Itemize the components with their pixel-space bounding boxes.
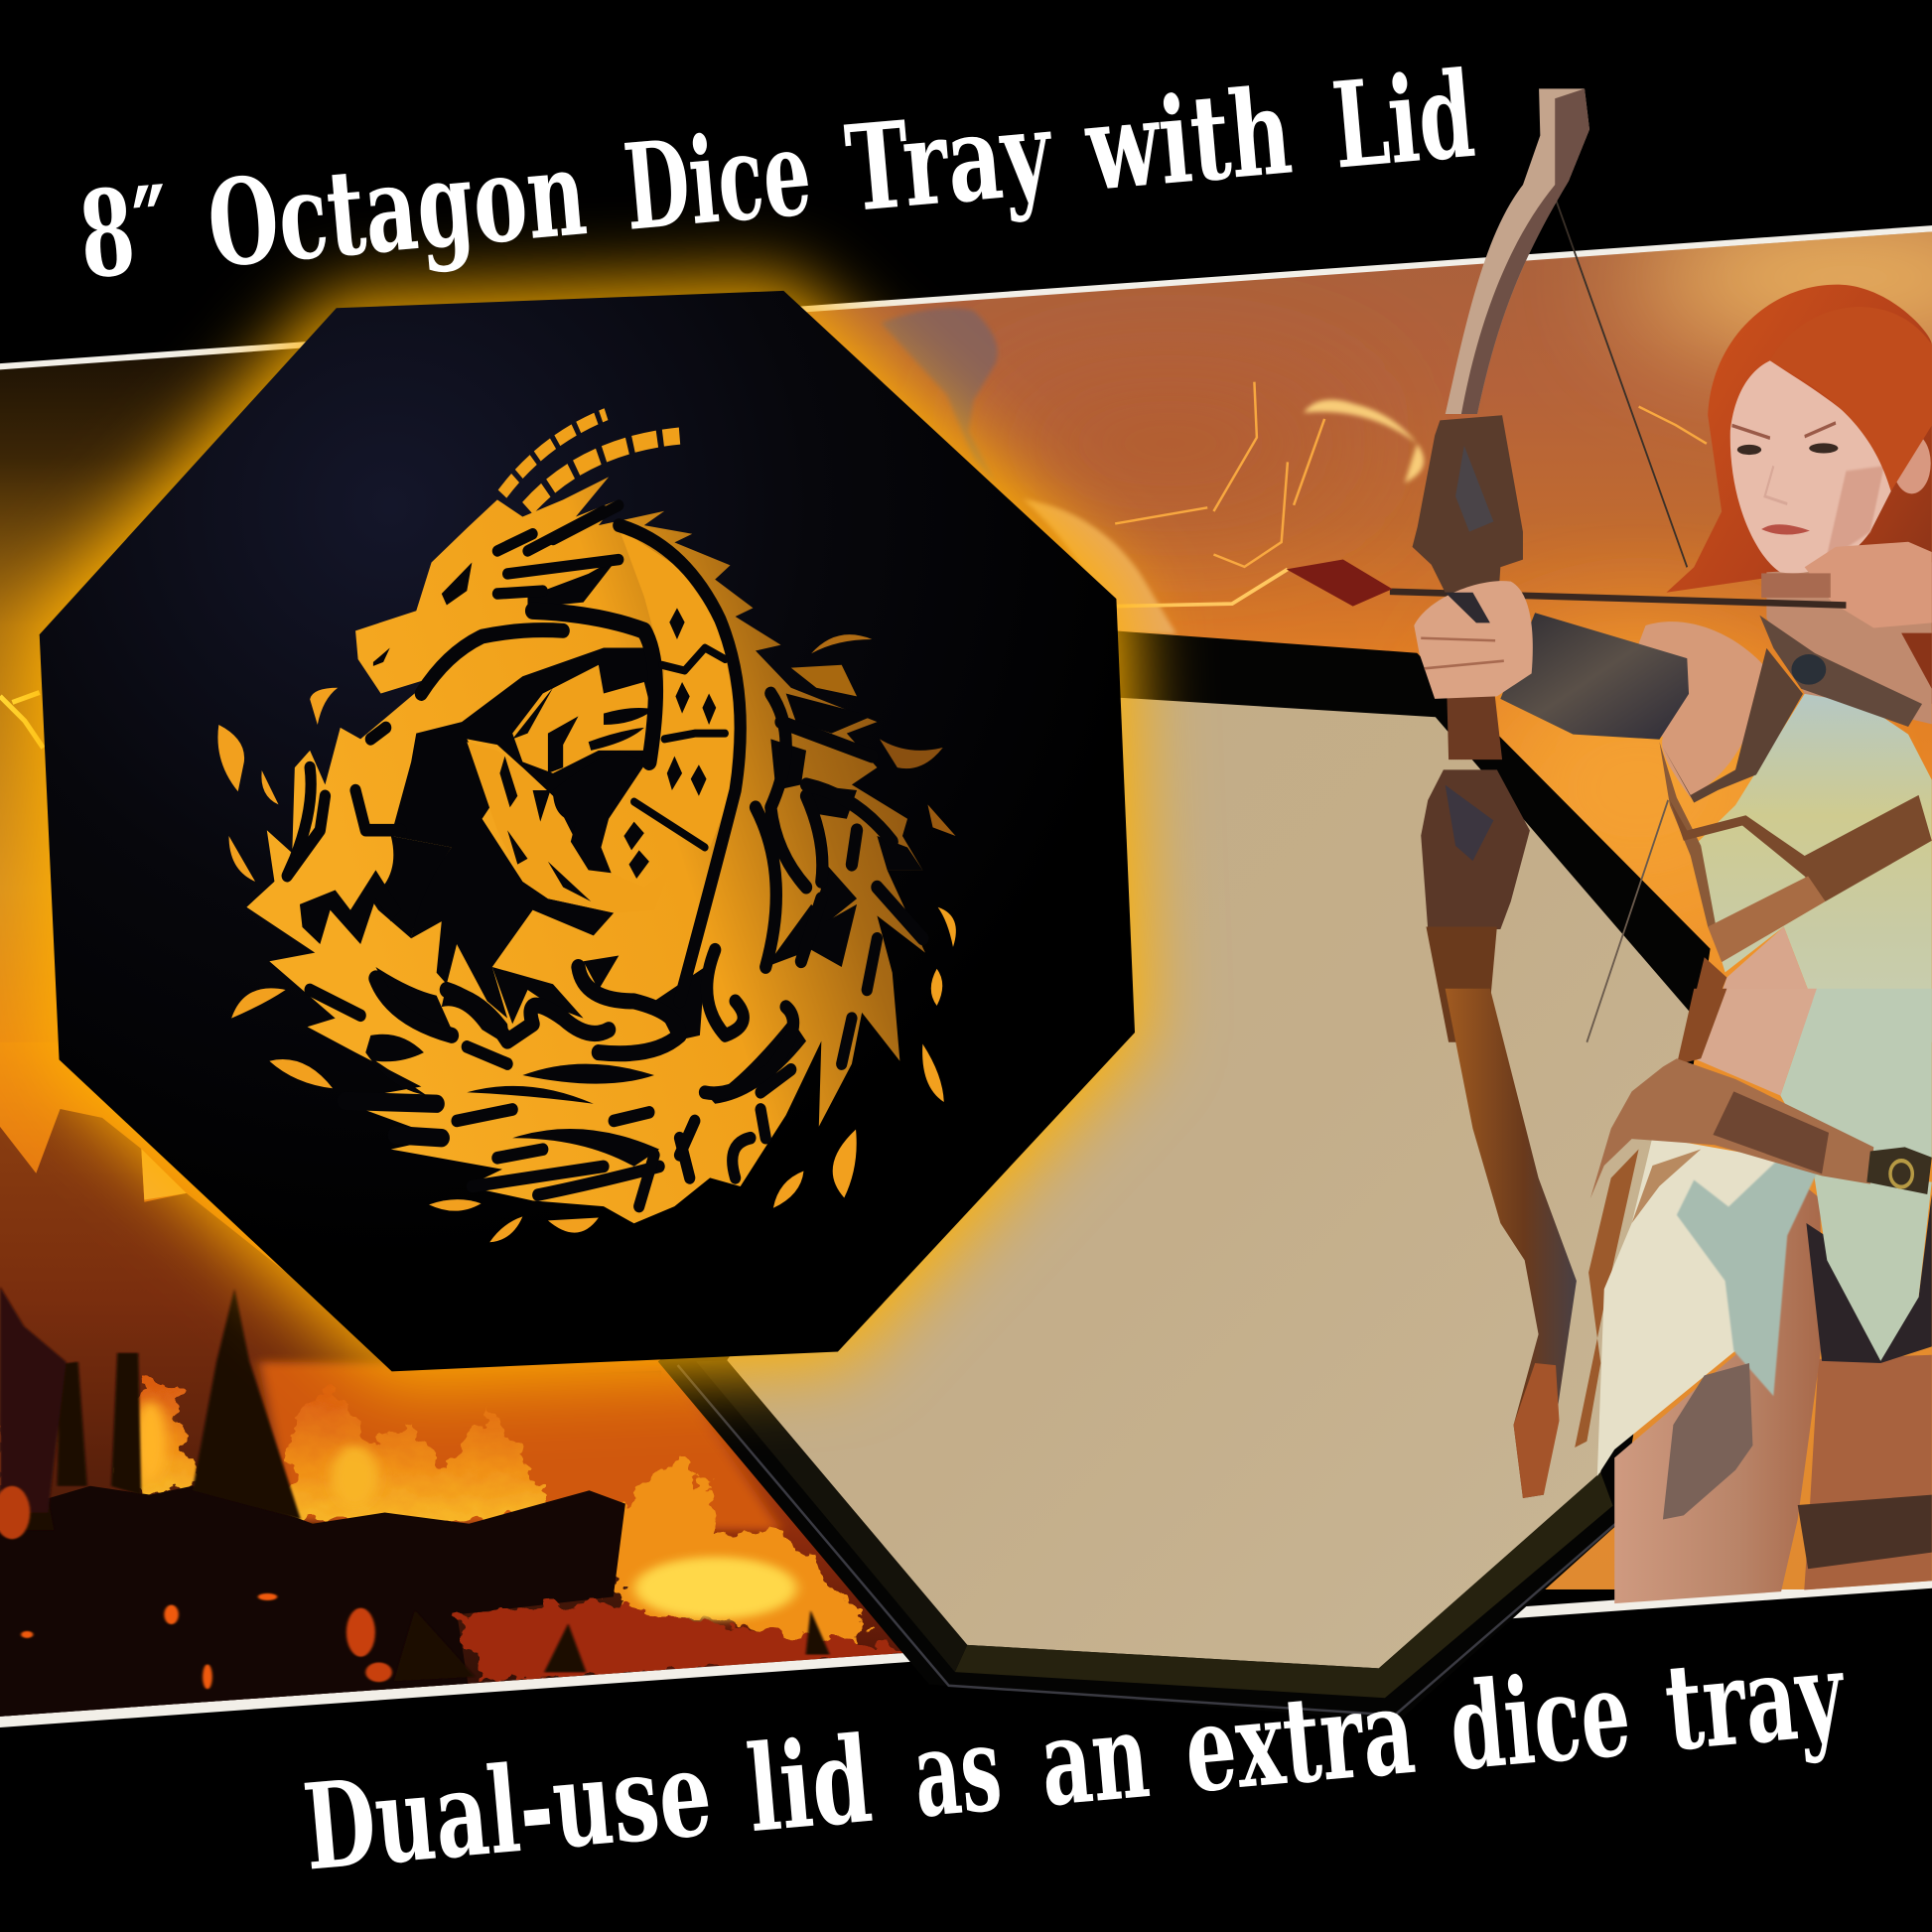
bottom caption: Dual-use [299, 1724, 717, 1898]
dragon flame silhouette [246, 477, 925, 1223]
flames [0, 1380, 866, 1641]
upper torso [1780, 989, 1932, 1182]
bow upper limb shadow [1461, 88, 1589, 414]
tray outer black rim [658, 630, 1711, 1722]
yellow fire core left [331, 1447, 379, 1508]
skirt tan fold [1632, 1149, 1701, 1223]
tray rim seams [678, 1365, 1616, 1716]
bottom caption: extra [1179, 1662, 1420, 1820]
chest strap [1670, 795, 1932, 901]
title: Dice [619, 103, 816, 258]
front thigh [1614, 1158, 1822, 1610]
arrow shaft [1390, 592, 1846, 606]
bow middle [1447, 684, 1502, 759]
sky left [0, 347, 300, 1042]
dragon outlines and streaks [287, 505, 922, 1206]
bottom caption [299, 1624, 1852, 1898]
bow string lower [1587, 800, 1668, 1042]
bow lower grip [1421, 769, 1530, 929]
side sash [1684, 957, 1726, 1042]
hair lower right [1901, 633, 1932, 689]
detached flame sparks [217, 634, 956, 1242]
bow string upper [1555, 198, 1687, 567]
dragon wing flames [512, 665, 654, 773]
bracer [1500, 613, 1689, 740]
hair back [1666, 285, 1932, 704]
right hand [1805, 542, 1932, 628]
tray inner wall lower [955, 1472, 1613, 1698]
bow upper grip [1413, 415, 1523, 593]
dragon black centre [391, 648, 662, 1019]
yellow fire core [634, 1557, 796, 1619]
buckle ring [1890, 1161, 1912, 1187]
garter [1798, 1495, 1932, 1569]
archer lower body [1446, 989, 1932, 1610]
shoulder strap [1759, 616, 1922, 727]
title: Octagon [203, 123, 592, 295]
thigh strap [1663, 1363, 1752, 1520]
grip over hand [1446, 593, 1490, 622]
archer upper body [1390, 198, 1932, 1042]
lips [1761, 524, 1810, 535]
panel: open dice tray [658, 630, 1711, 1722]
eyes [1737, 443, 1838, 455]
sky right [763, 221, 1932, 1589]
waist [1694, 989, 1817, 1096]
yellow glow behind lid [40, 291, 1135, 1371]
bow grip panel [1455, 446, 1493, 532]
dark spires [0, 1287, 830, 1681]
bottom caption: lid [742, 1711, 877, 1860]
orange haze base [23, 1155, 903, 1708]
skirt [1597, 1137, 1817, 1476]
bow lower limb [1426, 926, 1497, 1042]
nose shadow [1765, 466, 1787, 504]
dragon horns [502, 414, 680, 508]
arrow head [1287, 559, 1392, 607]
lower chest strap [1708, 876, 1826, 962]
panel: octagon lid [40, 291, 1135, 1371]
waist skin [1705, 926, 1815, 1042]
dark rock mass [0, 1486, 625, 1722]
tray felt surface [727, 697, 1691, 1668]
shoulder stud [1791, 654, 1826, 685]
dress bodice [1694, 694, 1932, 1042]
skirt shadow [1677, 1158, 1819, 1396]
shorts [1806, 1194, 1932, 1363]
bottom caption: dice [1445, 1644, 1635, 1798]
volcanic fire landscape [0, 1109, 903, 1717]
finger lines [1421, 638, 1504, 668]
red foreground fire [457, 1601, 901, 1681]
flame wall [289, 1388, 553, 1524]
small side flames [0, 1424, 36, 1544]
centre panel [1813, 1170, 1932, 1361]
dragon body scales panel [619, 528, 736, 847]
cheek shading [1826, 466, 1884, 562]
dragon black cut-out shapes [300, 557, 922, 1167]
armpit strap [1663, 648, 1803, 802]
left hand [1414, 581, 1533, 699]
belt [1590, 1058, 1873, 1198]
orange valley haze [258, 1362, 781, 1530]
title: Tray [841, 82, 1059, 239]
bow copper tip [1514, 1363, 1560, 1498]
title [74, 46, 1479, 306]
eyebrows [1732, 423, 1836, 438]
under-arm edge [1659, 742, 1722, 957]
belt pouch [1713, 1091, 1829, 1173]
bow limb bottom [1446, 989, 1577, 1498]
tray inner wall left [696, 1360, 967, 1672]
mountains [0, 1109, 661, 1738]
bottom caption: tray [1660, 1624, 1852, 1778]
title: Lid [1327, 46, 1479, 197]
title: with [1079, 63, 1297, 218]
lightning bolts [0, 382, 1707, 748]
panel: archer figure [1287, 88, 1932, 1610]
embers [0, 1486, 392, 1689]
white bottom edge of band [0, 1578, 1932, 1727]
lit gap between peaks [141, 1149, 187, 1200]
bottom caption: as [908, 1699, 1007, 1845]
foreground flame mass [602, 1454, 866, 1641]
title: 8″ [74, 160, 175, 306]
scenery artwork [0, 215, 1932, 1738]
string hand strap [1761, 573, 1831, 598]
back sash [1575, 1149, 1639, 1448]
bright sky glow upper right [1495, 232, 1932, 923]
lid body [40, 291, 1135, 1371]
clouds [881, 308, 1424, 634]
orange fire core [133, 1402, 167, 1481]
belt buckle [1866, 1147, 1932, 1194]
rear leg [1803, 1355, 1932, 1610]
face [1730, 360, 1891, 573]
dragon scale diamonds [373, 562, 716, 879]
dragon emblem [217, 414, 956, 1242]
arm and shoulder [1604, 621, 1766, 797]
neck [1766, 562, 1932, 724]
white top edge of band [0, 225, 1932, 376]
panel: scenery band [0, 215, 1932, 1738]
bottom caption: an [1035, 1686, 1155, 1834]
upper sash [1677, 989, 1726, 1064]
hair lock [1770, 307, 1932, 491]
bow upper limb [1446, 88, 1589, 414]
flame pillar [117, 1380, 193, 1497]
ear [1892, 433, 1931, 493]
dragon body flames [467, 742, 669, 912]
bow lower grip panel [1446, 785, 1493, 861]
